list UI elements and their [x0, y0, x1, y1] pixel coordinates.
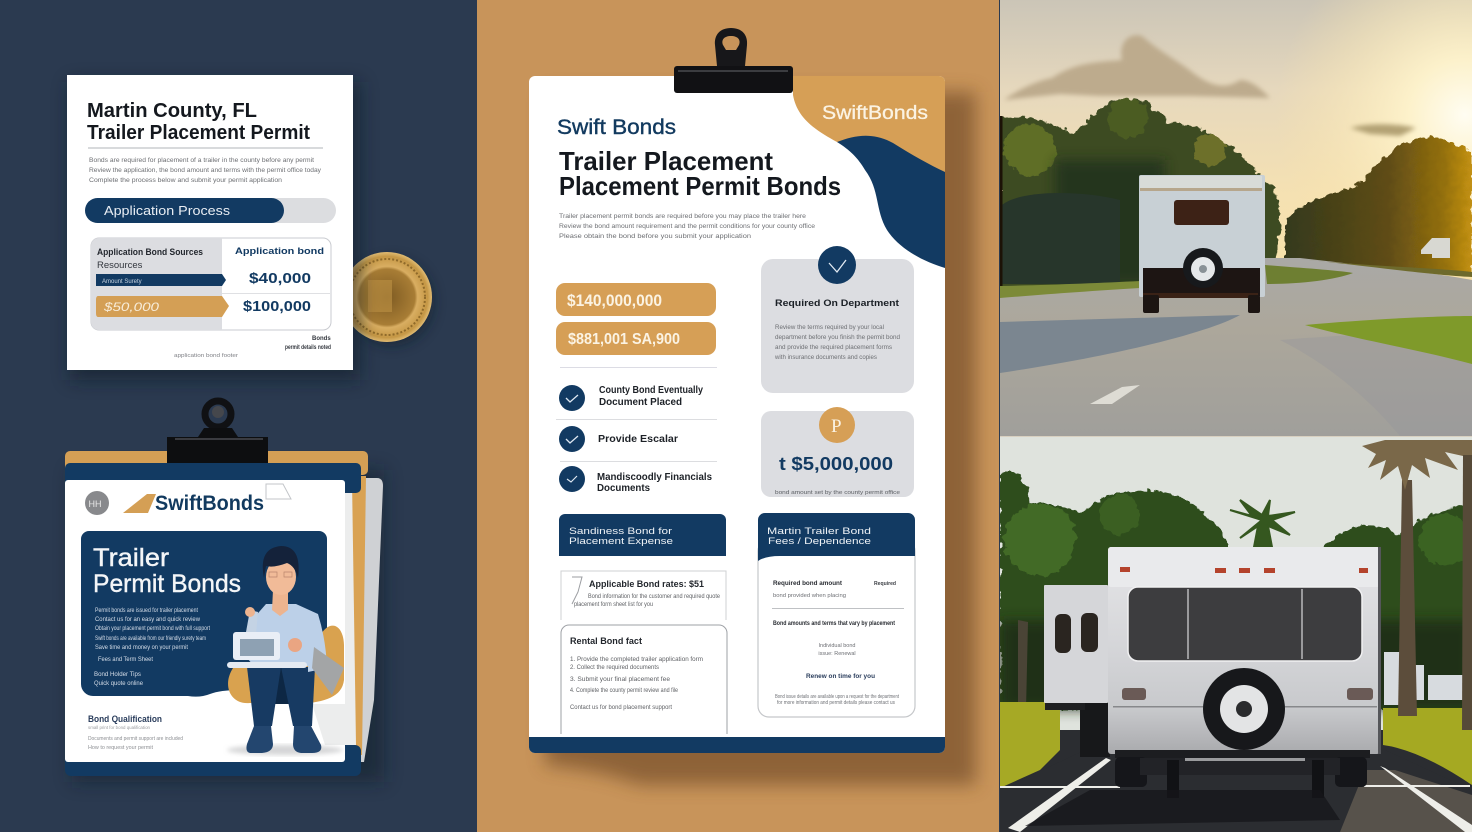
section: left column header: Placement Expense [569, 536, 673, 547]
main title: Placement Permit Bonds [559, 171, 841, 201]
roadside sign [1421, 238, 1450, 258]
box: left upper [561, 571, 726, 620]
check item 1: Document Placed [599, 397, 682, 408]
card: right column details: Fees / Dependence [768, 536, 871, 547]
folder footer text: How to request your permit [88, 745, 153, 751]
box: left lower list: 2. Collect the required documents [570, 665, 659, 671]
chassis and wheels [1025, 750, 1370, 826]
illustrated person with laptop [227, 546, 345, 755]
rear trailer [1139, 175, 1265, 313]
bond amounts table: $100,000 [243, 298, 311, 315]
document: Martin County permit sheet [67, 75, 360, 380]
check item 1 [559, 385, 703, 411]
section: left column header [559, 514, 726, 556]
permit intro text: Complete the process below and submit your permit application [89, 177, 282, 184]
card: right column details: Martin Trailer Bond [767, 526, 871, 537]
check item 3: Documents [597, 483, 650, 494]
navy hero panel: Obtain your placement permit bond with full support [95, 626, 210, 632]
distant vehicles [1384, 652, 1465, 705]
card: right column details [758, 513, 915, 717]
laptop [233, 632, 280, 660]
card: bond amount: bond amount set by the county permit office [775, 490, 900, 496]
box: left lower list [561, 625, 727, 734]
navy hero panel: Quick quote online [94, 681, 144, 687]
bond amounts table [91, 238, 331, 330]
box: left upper: placement form sheet list for you [574, 602, 653, 608]
glasses [269, 572, 292, 577]
folder footer text: Bond Qualification [88, 714, 162, 724]
check item 2: Provide Escalar [598, 434, 678, 445]
photo: parked trailer with palms [1000, 437, 1472, 832]
checklist [556, 385, 717, 494]
permit footnotes: permit details noted [285, 345, 331, 351]
card: right column details: Individual bond [818, 643, 856, 649]
binder clip, folder [167, 401, 268, 463]
card: right column details: Bond issue details are available upon a request for the department [775, 694, 900, 700]
card: right column details: Required bond amount [773, 581, 842, 587]
bond amounts table: $50,000 [103, 300, 159, 314]
application process bar [85, 198, 336, 223]
box: left lower list: Contact us for bond placement support [570, 705, 672, 711]
permit title: Martin County, FL [87, 100, 257, 122]
folder carried at side [312, 647, 344, 695]
amount pills: $140,000,000 [567, 291, 662, 310]
box: left lower list: 3. Submit your final placement fee [570, 677, 671, 683]
permit footnotes: Bonds [312, 336, 331, 342]
brand name: Swift Bonds [557, 116, 676, 139]
gold coin seal [342, 252, 434, 346]
slide-out section [1044, 585, 1110, 757]
folder back pages [345, 476, 383, 762]
main document: Trailer Placement Permit Bonds [529, 28, 976, 785]
parking lines [1000, 758, 1472, 832]
intro paragraph: Review the bond amount requirement and the permit conditions for your county office [559, 223, 815, 230]
card: requirements: Required On Department [775, 298, 900, 309]
check item 1: County Bond Eventually [599, 385, 703, 396]
card: right column details: Required [874, 581, 896, 587]
page shade below blob [312, 704, 345, 745]
navy hero panel: Permit bonds are issued for trailer placement [95, 608, 198, 614]
bond amounts table: Resources [97, 260, 143, 271]
bond amounts table: Application Bond Sources [97, 247, 203, 258]
trees right [1285, 137, 1472, 272]
road shadow [1000, 315, 1240, 373]
corner brand: SwiftBonds [822, 103, 928, 124]
permit title: Trailer Placement Permit [87, 122, 310, 144]
shoes [246, 726, 273, 753]
folder footer text [88, 714, 183, 751]
card: bond amount: P [831, 416, 842, 437]
ground base [1000, 730, 1472, 790]
main title: Trailer Placement [559, 146, 773, 176]
card: right column details: for more information and permit details please contact us [777, 700, 895, 706]
folder footer text: small print for bond qualification [88, 725, 150, 730]
seat shadow [262, 668, 302, 704]
card: right column details: bond provided when placing [773, 593, 846, 599]
card: requirements [761, 246, 914, 393]
navy hero panel: Swift bonds are available from our friendly surety team [95, 636, 206, 642]
logo block: SwiftBonds [155, 492, 264, 515]
grass strips [1000, 281, 1140, 298]
bond amounts table: Amount Surety [102, 279, 142, 285]
hair [263, 546, 299, 578]
spare tire [1203, 668, 1285, 750]
bond amounts table: Application bond [235, 246, 324, 257]
navy hero panel: Save time and money on your permit [95, 645, 188, 651]
card: bond amount [761, 407, 914, 497]
palm trees [1362, 440, 1472, 730]
box: left lower list: 4. Complete the county permit review and file [570, 688, 679, 694]
tree line [1000, 472, 1472, 710]
check item 2 [559, 426, 678, 452]
card: requirements: Review the terms required by your local [775, 324, 885, 331]
folder footer text: Documents and permit support are included [88, 736, 183, 742]
document: SwiftBonds trailer permit folder [65, 401, 384, 782]
permit footer line: application bond footer [174, 353, 238, 359]
permit intro text: Review the application, the bond amount and terms with the permit office today [89, 167, 322, 174]
application process bar: Application Process [104, 203, 231, 218]
road arrow marking [1090, 385, 1140, 404]
card: right column details: Bond amounts and terms that vary by placement [773, 621, 895, 627]
sky [1000, 437, 1472, 737]
section: left column header: Sandiness Bond for [569, 526, 672, 537]
navy hero panel: Trailer [93, 544, 169, 572]
amount pills [556, 283, 716, 355]
card: right column details: issue: Renewal [818, 651, 856, 657]
sky [1000, 0, 1472, 300]
intro paragraph: Trailer placement permit bonds are required before you may place the trailer here [559, 213, 806, 220]
navy hero panel: Fees and Term Sheet [98, 657, 153, 663]
box: left lower list: Rental Bond fact [570, 636, 643, 647]
intro paragraph: Please obtain the bond before you submit your application [559, 233, 751, 240]
road [1000, 258, 1472, 436]
tan background panel [477, 0, 999, 832]
check item 3 [559, 466, 712, 494]
footer band [529, 737, 945, 753]
navy hero panel: Permit Bonds [93, 570, 241, 598]
card: bond amount: t $5,000,000 [779, 454, 893, 474]
navy hero panel: Contact us for an easy and quick review [95, 617, 201, 623]
box: left upper: Bond information for the customer and required quote [588, 594, 721, 600]
neck and face [272, 590, 288, 616]
box: left lower list: 1. Provide the completed trailer application form [570, 657, 703, 663]
logo block [85, 484, 291, 515]
binder clip, main [674, 28, 793, 93]
trees left [1000, 98, 1280, 292]
photo divider [1000, 435, 1472, 438]
navy hero panel: Bond Holder Tips [94, 672, 141, 678]
check item 3: Mandiscoodly Financials [597, 472, 712, 483]
dark understory [1000, 620, 1472, 710]
card: requirements: and provide the required placement forms [775, 344, 893, 351]
photo: trailer on road at sunset [1000, 0, 1472, 436]
clouds [1004, 35, 1416, 136]
permit intro text: Bonds are required for placement of a trailer in the county before any permit [89, 157, 314, 164]
legs [247, 667, 281, 726]
torso and arms [240, 604, 327, 672]
orange blob behind person [228, 626, 344, 704]
trailer body [1108, 547, 1381, 754]
card: requirements: department before you finish the permit bond [775, 334, 900, 341]
asphalt [1000, 750, 1472, 832]
amount pills: $881,001 SA,900 [568, 331, 680, 348]
corner wave: navy [837, 136, 945, 268]
corner wave: tan [793, 76, 945, 268]
card: requirements: with insurance documents and copies [774, 354, 878, 361]
box: left upper: Applicable Bond rates: $51 [589, 579, 705, 590]
palm behind trailer [1230, 500, 1295, 547]
card: right column details: Renew on time for you [806, 674, 875, 680]
logo block: HH [88, 499, 102, 509]
navy hero panel [81, 531, 327, 697]
grass [1000, 702, 1060, 788]
navy background panel [0, 0, 477, 832]
bond amounts table: $40,000 [249, 270, 311, 287]
